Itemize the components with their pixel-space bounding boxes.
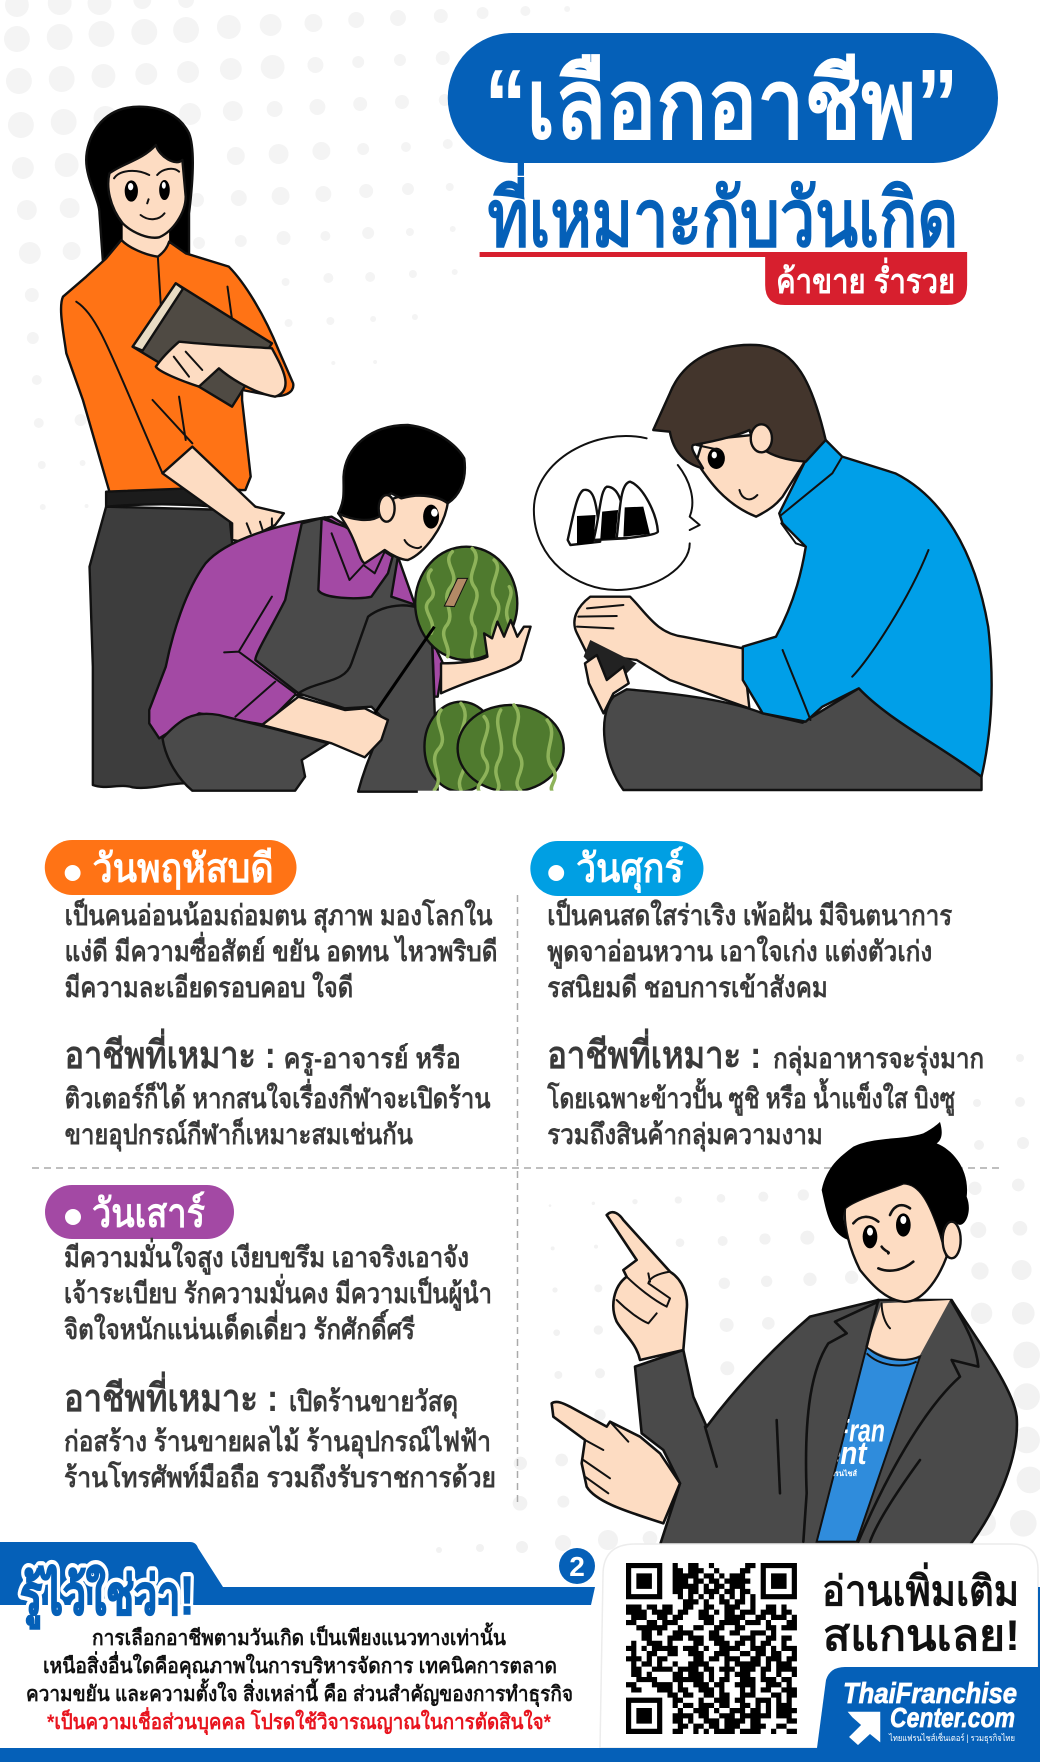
Friday description: เป็นคนสดใสร่าเริง เพ้อฝัน มีจินตนาการ: [547, 898, 952, 931]
eye: [423, 505, 439, 529]
blue ribbon: [0, 1542, 595, 1605]
shirt: [61, 240, 293, 492]
front leg: [298, 605, 438, 792]
lower hand: [552, 1402, 680, 1523]
belt: [106, 488, 240, 508]
arm and hand: [574, 597, 749, 708]
QR code: [626, 1566, 797, 1731]
heading: รู้ไว้ใช่ว่า!: [20, 1564, 194, 1629]
ear: [751, 424, 772, 452]
shirt: [817, 1347, 920, 1542]
purple shirt: [149, 517, 443, 738]
apron: [255, 517, 434, 705]
note text: การเลือกอาชีพตามวันเกิด เป็นเพียงแนวทางเท่านั้น: [92, 1622, 507, 1650]
collar lines: [332, 533, 385, 580]
background dots lower right: [436, 1054, 1040, 1553]
illustration: man in blue with sushi: [534, 345, 992, 790]
shirt folds: [76, 257, 232, 473]
shirt logo text: Fran: [835, 1413, 885, 1449]
shirt logo text: แฟรนไชส์: [825, 1469, 858, 1478]
Friday pill: [530, 841, 703, 896]
note text: [26, 1622, 573, 1736]
book: [133, 283, 272, 407]
arm over book: [156, 342, 286, 397]
neck: [123, 223, 169, 258]
hair back: [86, 107, 193, 260]
right edge blue strip: [1038, 1587, 1040, 1748]
Saturday careers: เปิดร้านขายวัสดุ: [289, 1386, 458, 1419]
lower hand fingers: [585, 655, 629, 713]
sushi piece in hand: [584, 640, 637, 687]
white QR card: [600, 1544, 1038, 1748]
ThaiFranchise Center logo panel: [817, 1667, 1038, 1748]
Friday pill: วันศุกร์: [576, 846, 684, 894]
arm with knife: [262, 697, 388, 757]
neck and face: [338, 495, 448, 563]
hair: [822, 1122, 969, 1240]
bottom watermelons: [418, 702, 577, 797]
eye: [708, 448, 725, 469]
Friday description: รสนิยมดี ชอบการเข้าสังคม: [547, 972, 828, 1003]
brows and smile: [114, 169, 179, 219]
hair: [338, 425, 465, 520]
page number: [559, 1548, 595, 1584]
Thursday pill: วันพฤหัสบดี: [93, 847, 274, 891]
upper hand: [607, 1212, 687, 1360]
Friday description: [547, 898, 952, 1003]
panel: Friday: [530, 841, 984, 1152]
Saturday pill: [45, 1185, 234, 1239]
Thursday careers: ครู-อาจารย์ หรือ: [284, 1043, 461, 1076]
Saturday careers: อาชีพที่เหมาะ :: [64, 1371, 278, 1420]
icon: arrow: [846, 1711, 881, 1746]
page number: 2: [569, 1551, 585, 1582]
illustration: presenter pointing: [552, 1122, 1017, 1545]
sushi icon: [568, 490, 600, 545]
ThaiFranchise Center logo panel: Center.com: [890, 1702, 1015, 1733]
shirt logo text: ent: [825, 1435, 868, 1471]
Thursday careers: ขายอุปกรณ์กีฬาก็เหมาะสมเช่นกัน: [65, 1117, 413, 1152]
Thursday description: แง่ดี มีความซื่อสัตย์ ขยัน อดทน ไหวพริบดี: [65, 931, 497, 967]
shirt logo text: [834, 1419, 884, 1476]
Friday careers: กลุ่มอาหารจะรุ่งมาก: [773, 1043, 984, 1076]
heading: รู้ไว้ใช่ว่า!: [20, 1564, 194, 1629]
Friday description: พูดจาอ่อนหวาน เอาใจเก่ง แต่งตัวเก่ง: [547, 935, 932, 969]
face: [845, 1183, 947, 1302]
background dots top-left: [4, 0, 570, 510]
forearm and hand on shoulder: [162, 447, 284, 542]
Thursday description: มีความละเอียดรอบคอบ ใจดี: [65, 971, 353, 1003]
ear: [943, 1222, 961, 1258]
Saturday description: เจ้าระเบียบ รักความมั่นคง มีความเป็นผู้นำ: [64, 1273, 492, 1311]
scan call to action: สแกนเลย!: [823, 1612, 1020, 1660]
Saturday description: [63, 1237, 492, 1345]
thought bubble: [534, 436, 700, 590]
divider lines: [32, 895, 1002, 1506]
note text: เหนือสิ่งอื่นใดคือคุณภาพในการบริหารจัดการ เทคนิคการตลาด: [43, 1650, 557, 1680]
Thursday description: [65, 898, 497, 1003]
illustration: man with watermelons in purple: [149, 425, 577, 797]
back leg: [162, 714, 328, 791]
note text: ความขยัน และความตั้งใจ สิ่งเหล่านี้ คือ ส่วนสำคัญของการทำธุรกิจ: [26, 1678, 573, 1708]
smile: [696, 445, 757, 499]
scan call to action: [822, 1562, 1020, 1660]
title pill: “เลือกอาชีพ”: [485, 50, 958, 159]
red tag: ค้าขาย ร่ำรวย: [776, 257, 955, 301]
neck: [867, 1300, 950, 1359]
eyes: [125, 180, 138, 202]
face: [696, 433, 806, 517]
knife: [375, 627, 434, 713]
lapels: [705, 1300, 978, 1542]
blue shirt: [743, 440, 992, 777]
eyes: [863, 1225, 877, 1248]
Thursday description: เป็นคนอ่อนน้อมถ่อมตน สุภาพ มองโลกใน: [65, 898, 493, 933]
ear: [379, 495, 395, 522]
panel: Thursday: [45, 840, 497, 1152]
sleeve lines: [224, 597, 295, 717]
scan call to action: อ่านเพิ่มเติม: [822, 1562, 1019, 1614]
knife handle: [444, 578, 468, 607]
Thursday pill: [45, 840, 297, 895]
smile: [405, 540, 421, 548]
Saturday careers: [64, 1371, 496, 1493]
panel: Saturday: [45, 1185, 496, 1493]
Thursday careers: ติวเตอร์ก็ได้ หากสนใจเรื่องกีฬาจะเปิดร้าน: [65, 1078, 491, 1114]
jacket: [635, 1300, 1017, 1545]
Thursday careers: อาชีพที่เหมาะ :: [65, 1028, 276, 1077]
hand on watermelon: [441, 620, 531, 693]
shirt lines: [781, 457, 928, 720]
Friday careers: โดยเฉพาะข้าวปั้น ซูชิ หรือ น้ำแข็งใส บิงซู: [546, 1077, 955, 1116]
Friday careers: [546, 1028, 984, 1152]
hair: [653, 345, 826, 468]
face: [108, 145, 186, 238]
bottom blue bar: [0, 1748, 1040, 1762]
skirt: [90, 507, 232, 788]
Thursday careers: [65, 1028, 491, 1152]
Friday careers: รวมถึงสินค้ากลุ่มความงาม: [547, 1119, 823, 1152]
trousers: [604, 688, 982, 790]
Saturday description: จิตใจหนักแน่นเด็ดเดี่ยว รักศักดิ์ศรี: [63, 1309, 415, 1345]
purple collar panel: [318, 518, 393, 598]
Saturday careers: ก่อสร้าง ร้านขายผลไม้ ร้านอุปกรณ์ไฟฟ้า: [64, 1425, 491, 1459]
Saturday description: มีความมั่นใจสูง เงียบขรึม เอาจริงเอาจัง: [64, 1237, 469, 1275]
shirt collar: [867, 1353, 917, 1365]
red tag: [480, 252, 967, 305]
top watermelon: [415, 547, 517, 660]
brows nose smile: [853, 1205, 913, 1271]
Friday careers: อาชีพที่เหมาะ :: [547, 1028, 761, 1077]
Saturday careers: ร้านโทรศัพท์มือถือ รวมถึงรับราชการด้วย: [64, 1460, 496, 1493]
ThaiFranchise Center logo panel: ไทยแฟรนไชส์เซ็นเตอร์ | รวมธุรกิจไทย: [888, 1731, 1015, 1744]
note text: *เป็นความเชื่อส่วนบุคคล โปรดใช้วิจารณญาณในการตัดสินใจ*: [47, 1706, 552, 1736]
ThaiFranchise Center logo panel: ThaiFranchise: [843, 1678, 1017, 1710]
Saturday pill: วันเสาร์: [92, 1191, 205, 1236]
banner: did you know: [0, 1542, 595, 1736]
illustration: woman teacher in orange: [61, 107, 293, 788]
